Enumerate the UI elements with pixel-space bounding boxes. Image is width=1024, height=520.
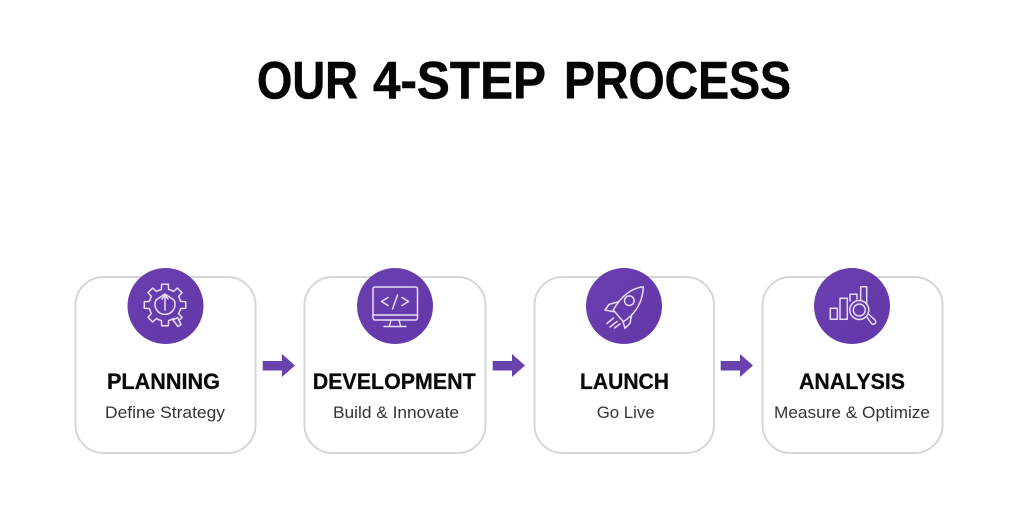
panel: planning bbox=[76, 268, 256, 453]
icon: gear with arrow bbox=[128, 268, 204, 344]
heading: analysis: ANALYSIS bbox=[799, 369, 905, 394]
subtitle: define strategy: Define Strategy bbox=[105, 403, 225, 422]
subtitle: measure and optimize: Measure & Optimize bbox=[774, 403, 930, 422]
title: 4-STEP bbox=[373, 52, 546, 110]
icon: bars and magnifier bbox=[814, 268, 890, 344]
title: PROCESS bbox=[564, 52, 791, 110]
heading: planning: PLANNING bbox=[107, 369, 220, 394]
arrow: planning to development bbox=[263, 354, 295, 377]
subtitle: go live: Go Live bbox=[597, 403, 655, 422]
card: launch bbox=[534, 277, 714, 453]
title bbox=[257, 52, 791, 110]
icon: code monitor bbox=[357, 268, 433, 344]
card: planning bbox=[76, 277, 256, 453]
heading: development: DEVELOPMENT bbox=[313, 369, 476, 394]
panel: analysis bbox=[762, 268, 942, 453]
title: OUR bbox=[257, 52, 358, 110]
arrow: launch to analysis bbox=[721, 354, 753, 377]
panel: development bbox=[304, 268, 486, 453]
card: development bbox=[304, 277, 486, 453]
panel: launch bbox=[534, 268, 714, 453]
card: analysis bbox=[762, 277, 942, 453]
arrow: development to launch bbox=[493, 354, 525, 377]
subtitle: build and innovate: Build & Innovate bbox=[333, 403, 459, 422]
icon: rocket bbox=[586, 268, 662, 344]
heading: launch: LAUNCH bbox=[580, 369, 669, 394]
